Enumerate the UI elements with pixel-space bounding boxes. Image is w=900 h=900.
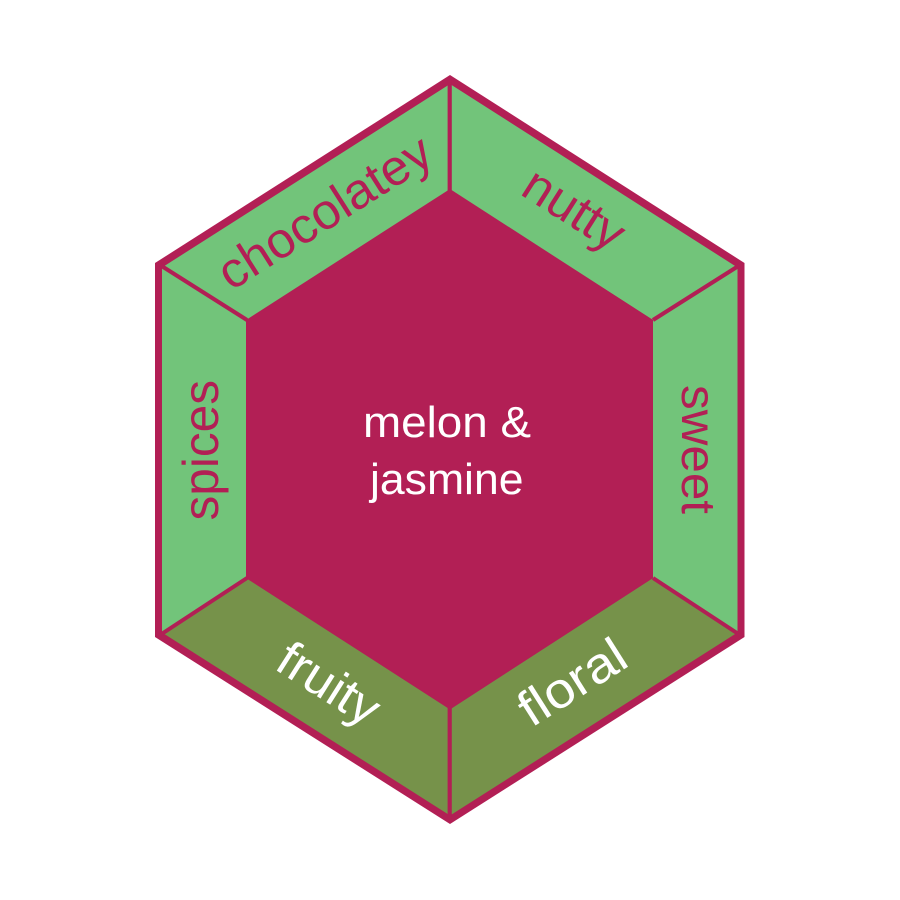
segment: fruity: fruity — [267, 630, 391, 737]
segment: chocolatey — [162, 84, 450, 320]
segment: nutty: nutty — [513, 156, 636, 262]
segment: spices: spices — [173, 380, 229, 520]
segment: nutty — [450, 84, 738, 320]
segment: fruity — [162, 578, 450, 816]
segment: floral — [450, 578, 738, 816]
centre label: melon & jasmine: melon & — [363, 398, 531, 447]
segment: sweet — [653, 268, 738, 632]
centre label: melon & jasmine: jasmine — [368, 455, 524, 504]
central hexagon — [246, 189, 653, 710]
segment: chocolatey: chocolatey — [207, 123, 442, 301]
centre label: melon & jasmine — [363, 398, 531, 504]
segment: sweet: sweet — [671, 385, 724, 514]
segment: spices — [162, 268, 246, 632]
outer hexagon border — [155, 75, 744, 824]
segment: floral: floral — [507, 627, 637, 737]
